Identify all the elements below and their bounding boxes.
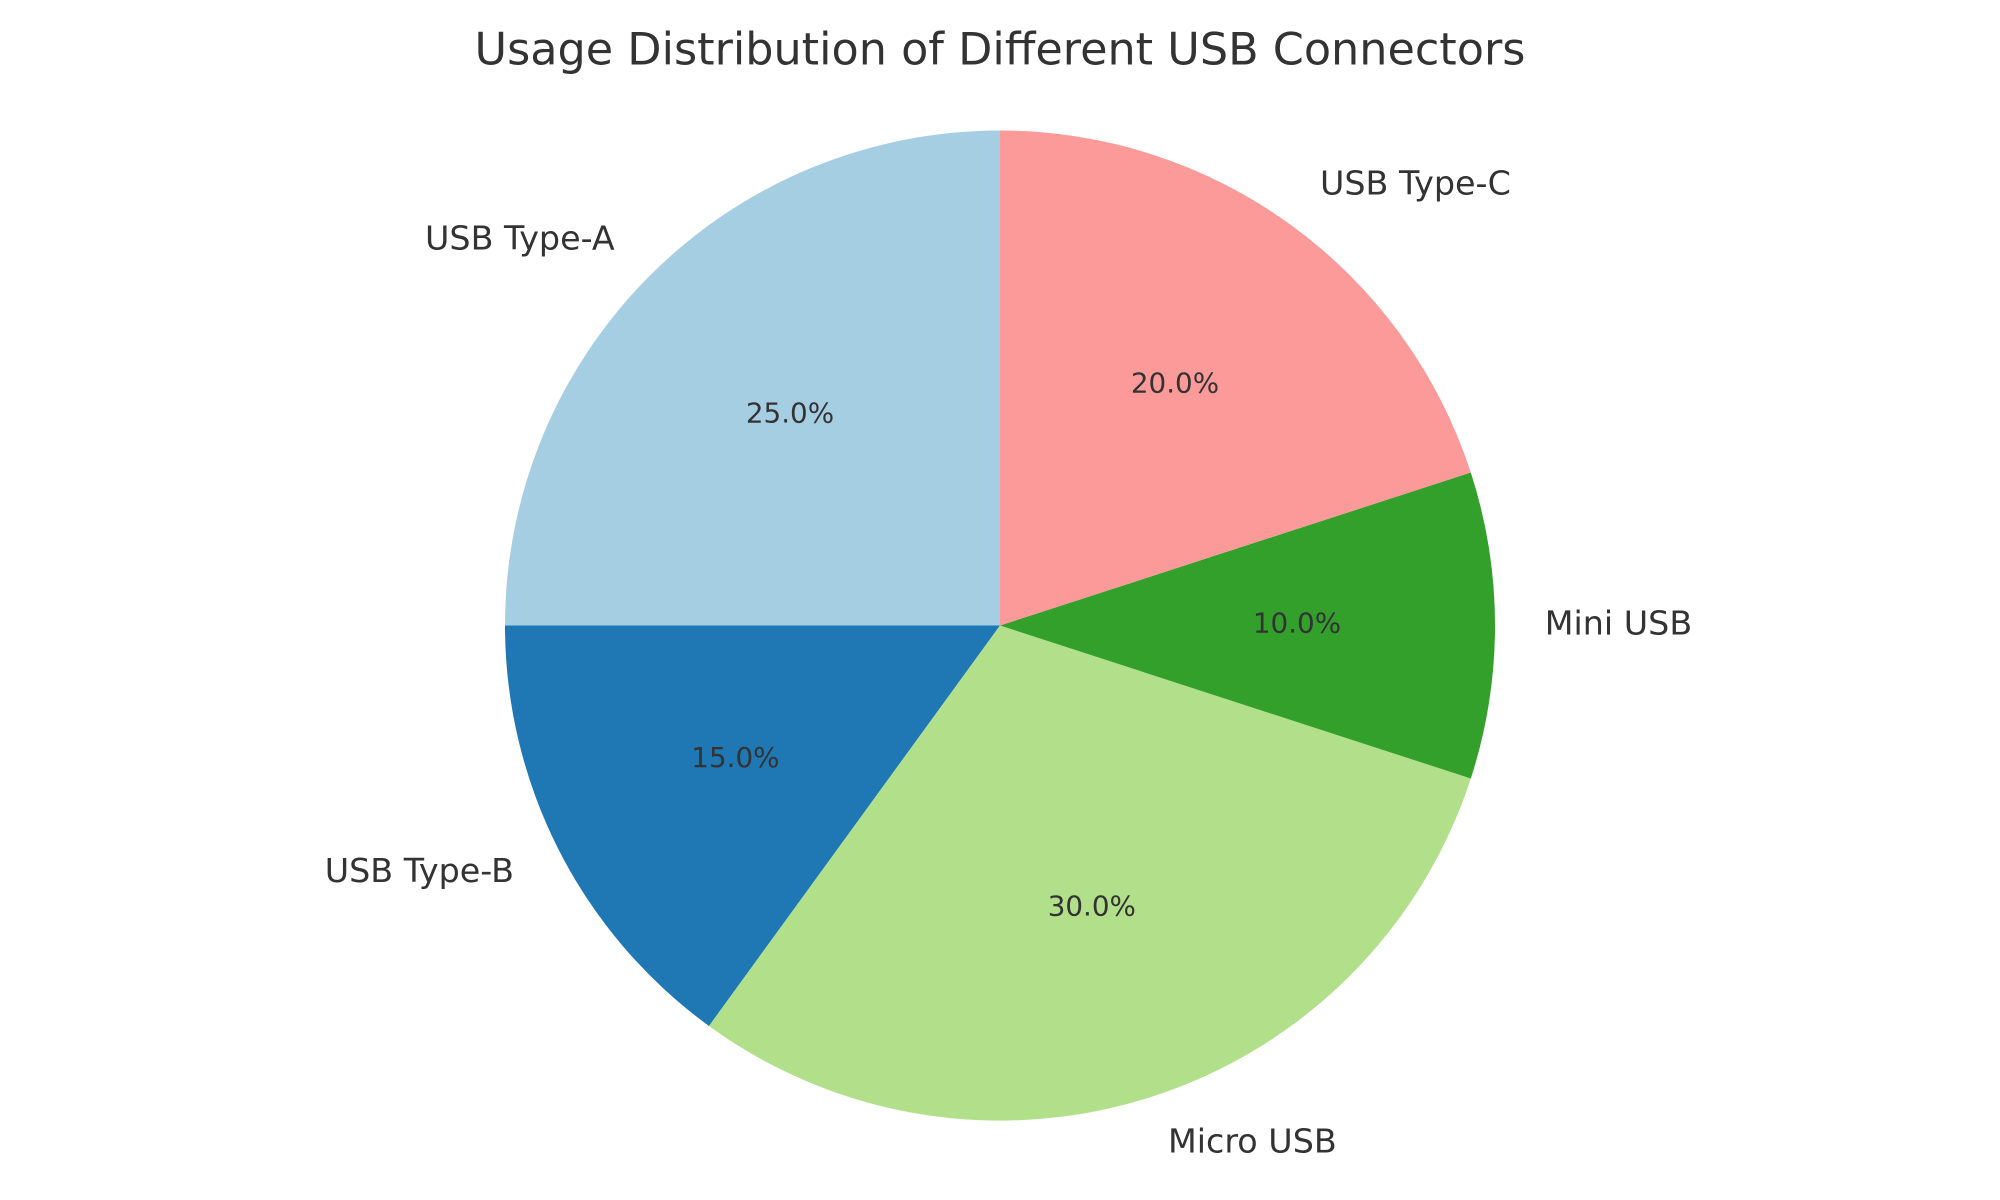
slice: USB Type-A xyxy=(505,130,1000,626)
label: USB Type-A: USB Type-A xyxy=(425,218,615,258)
percentage: USB Type-C: 20.0% xyxy=(1131,367,1219,400)
label: Micro USB: Micro USB xyxy=(1168,1122,1337,1160)
label: Mini USB: Mini USB xyxy=(1545,604,1692,642)
pie chart xyxy=(505,130,1495,1121)
label: USB Type-C: USB Type-C xyxy=(1320,164,1511,202)
slice: USB Type-C xyxy=(1000,130,1471,626)
slice: Micro USB xyxy=(709,626,1471,1121)
slice: Mini USB xyxy=(1000,472,1495,778)
percentage: USB Type-B: 15.0% xyxy=(691,741,780,774)
slice: USB Type-B xyxy=(505,626,1000,1026)
percentage: Micro USB: 30.0% xyxy=(1048,890,1136,922)
percentage: USB Type-A: 25.0% xyxy=(746,396,834,430)
label: USB Type-B: USB Type-B xyxy=(325,851,514,890)
title: Usage Distribution of Different USB Connectors xyxy=(475,24,1525,76)
percentage: Mini USB: 10.0% xyxy=(1253,606,1341,640)
